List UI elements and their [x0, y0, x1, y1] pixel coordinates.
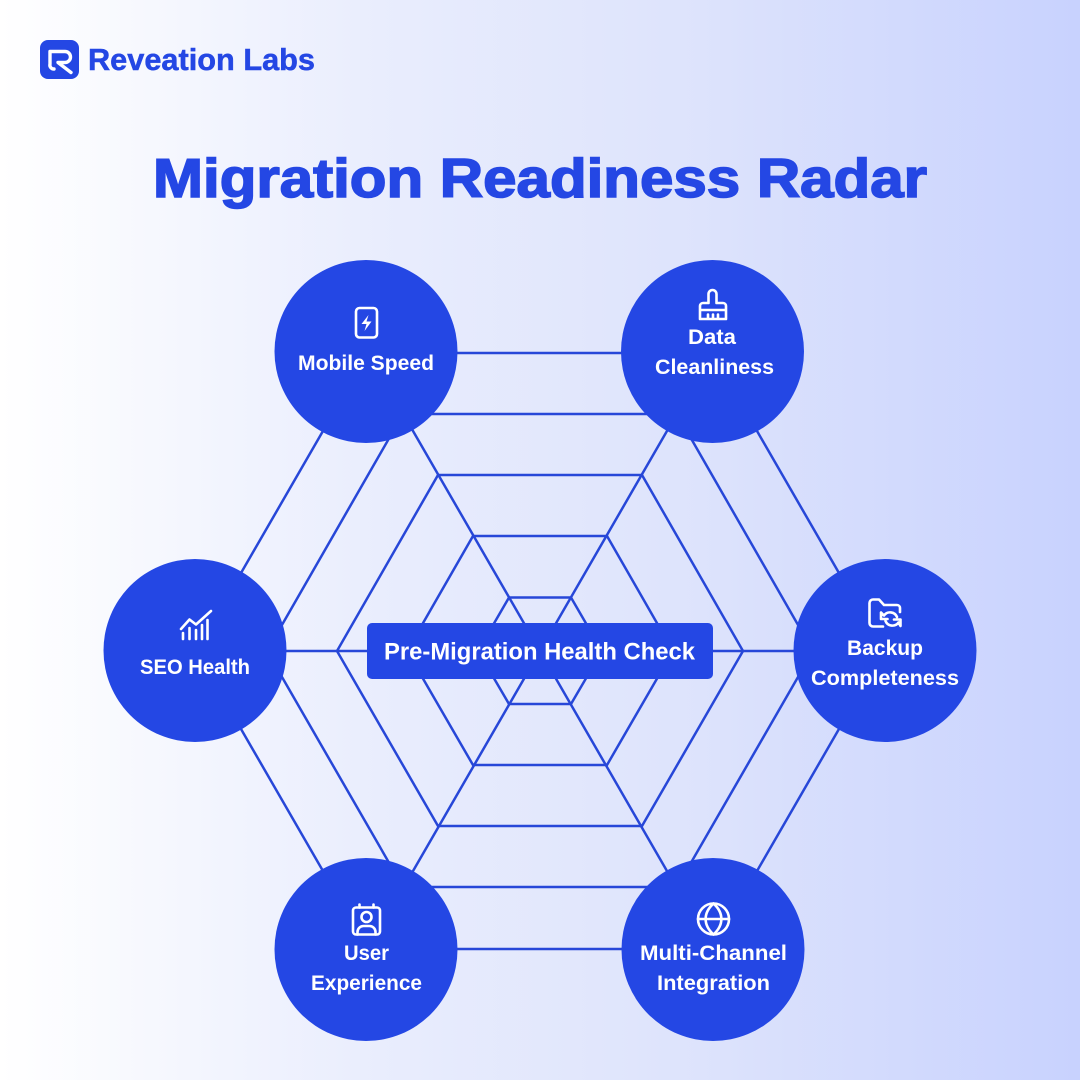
- icon: globe: [698, 904, 729, 934]
- node: Mobile Speed: [274, 260, 458, 443]
- node: Data Cleanliness: Cleanliness: [655, 356, 774, 379]
- title: Migration Readiness Radar: [153, 147, 927, 209]
- logo wordmark: Reveation Labs: [88, 42, 315, 77]
- icon: logo mark: [40, 40, 79, 79]
- node: User Experience: [274, 858, 458, 1041]
- node: Mobile Speed: Mobile Speed: [298, 352, 434, 375]
- node: Data Cleanliness: [621, 260, 804, 443]
- radar web: concentric hexagons and spokes: [196, 353, 884, 949]
- icon: broom: [700, 290, 726, 319]
- centre label: Pre-Migration Health Check: Pre-Migration Health Check: [384, 638, 696, 666]
- node: Multi-Channel Integration: Integration: [657, 972, 770, 995]
- node: User Experience: Experience: [311, 972, 422, 995]
- icon: phone with bolt: [356, 308, 377, 338]
- node: SEO Health: SEO Health: [140, 656, 250, 679]
- node: Data Cleanliness: Data: [688, 326, 736, 349]
- node: Multi-Channel Integration: [622, 858, 804, 1041]
- node: Multi-Channel Integration: Multi-Channel: [640, 942, 787, 965]
- icon: rising chart: [181, 611, 211, 639]
- node: Backup Completeness: [794, 559, 976, 742]
- node: Backup Completeness: Backup: [847, 637, 923, 660]
- icon: user badge: [353, 904, 380, 934]
- logo: Reveation Labs: [40, 40, 315, 79]
- node: Backup Completeness: Completeness: [811, 667, 959, 690]
- centre label: Pre-Migration Health Check: [367, 623, 713, 679]
- node: SEO Health: [104, 559, 286, 742]
- node: User Experience: User: [344, 942, 389, 965]
- icon: folder with sync arrows: [870, 600, 900, 626]
